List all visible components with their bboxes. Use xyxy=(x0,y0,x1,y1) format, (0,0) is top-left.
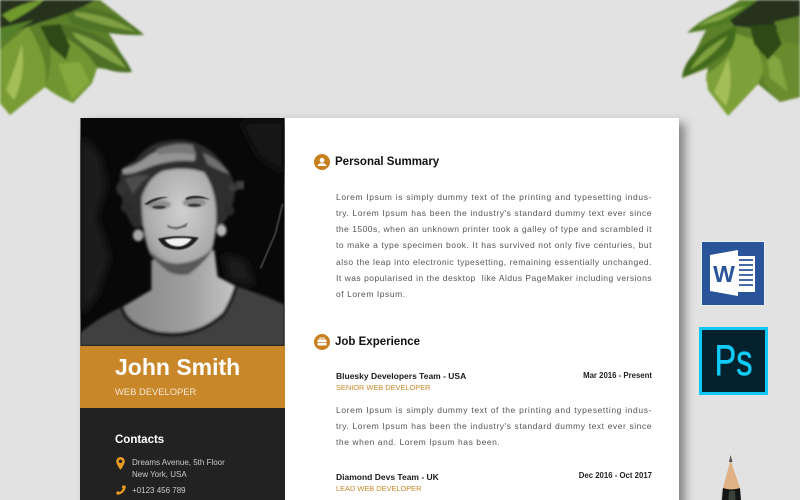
description xyxy=(336,405,652,447)
icon: pencil xyxy=(721,455,741,500)
panel: contacts xyxy=(80,408,285,500)
description: Lorem Ipsum is simply dummy text of the printing and typesetting indus- xyxy=(336,405,652,415)
portrait photo xyxy=(80,118,285,346)
address xyxy=(132,458,225,479)
name banner xyxy=(80,346,285,408)
ears xyxy=(133,229,144,241)
text block: summary xyxy=(336,192,652,299)
icon: person badge xyxy=(314,154,330,170)
address: New York, USA xyxy=(132,470,187,479)
contacts heading: Contacts xyxy=(115,434,164,446)
collar xyxy=(122,286,236,335)
text block: summary: also the leap into electronic typesetting, remaining essentially unchanged. xyxy=(336,257,652,267)
role: SENIOR WEB DEVELOPER xyxy=(336,383,430,392)
stubble xyxy=(149,249,213,275)
leaves: top right xyxy=(680,0,800,118)
text block: summary: Lorem Ipsum is simply dummy text of the printing and typesetting indus- xyxy=(336,192,652,202)
eyes xyxy=(152,206,166,209)
address: Dreams Avenue, 5th Floor xyxy=(132,458,225,467)
text block: summary: the 1500s, when an unknown printer took a galley of type and scrambled it xyxy=(336,224,652,234)
icon: word: W xyxy=(713,261,735,287)
text block: summary: try. Lorem Ipsum has been the industry's standard dummy text ever since xyxy=(336,208,652,218)
hair mass with curls xyxy=(116,140,235,227)
text block: summary: It was popularised in the desktop like Aldus PageMaker including versions xyxy=(336,273,652,283)
heading: personal summary: Personal Summary xyxy=(335,156,439,168)
description: try. Lorem Ipsum has been the industry's standard dummy text ever since xyxy=(336,421,652,431)
job: diamond devs xyxy=(336,471,652,493)
icon: photoshop xyxy=(699,327,768,395)
shirt xyxy=(80,286,285,346)
company: Bluesky Developers Team - USA xyxy=(336,371,466,381)
dates: Dec 2016 - Oct 2017 xyxy=(579,471,652,480)
text block: summary: to make a type specimen book. It has survived not only five centuries, but xyxy=(336,240,652,250)
chest and neck xyxy=(123,250,235,333)
nose xyxy=(167,222,188,230)
brows xyxy=(144,197,169,205)
mouth xyxy=(158,236,199,250)
eye sockets xyxy=(147,200,171,209)
phone number: +0123 456 789 xyxy=(132,486,186,495)
icon: phone xyxy=(116,485,126,495)
dates: Mar 2016 - Present xyxy=(583,371,652,380)
face xyxy=(142,169,216,274)
company: Diamond Devs Team - UK xyxy=(336,472,439,482)
hair highlights xyxy=(122,147,195,174)
icon: photoshop: Ps xyxy=(714,336,752,385)
name: John Smith xyxy=(115,354,240,380)
icon: word xyxy=(701,241,765,306)
heading: job experience: Job Experience xyxy=(335,336,420,348)
job title: WEB DEVELOPER xyxy=(115,386,196,397)
description: the when and. Lorem Ipsum has been. xyxy=(336,437,500,447)
resume card xyxy=(80,118,679,500)
icon: briefcase badge xyxy=(314,334,330,350)
job: bluesky developers xyxy=(336,371,652,447)
icon: location pin xyxy=(116,457,125,470)
text block: summary: of Lorem Ipsum. xyxy=(336,289,406,299)
role: LEAD WEB DEVELOPER xyxy=(336,484,421,493)
leaves: top left xyxy=(0,0,145,116)
